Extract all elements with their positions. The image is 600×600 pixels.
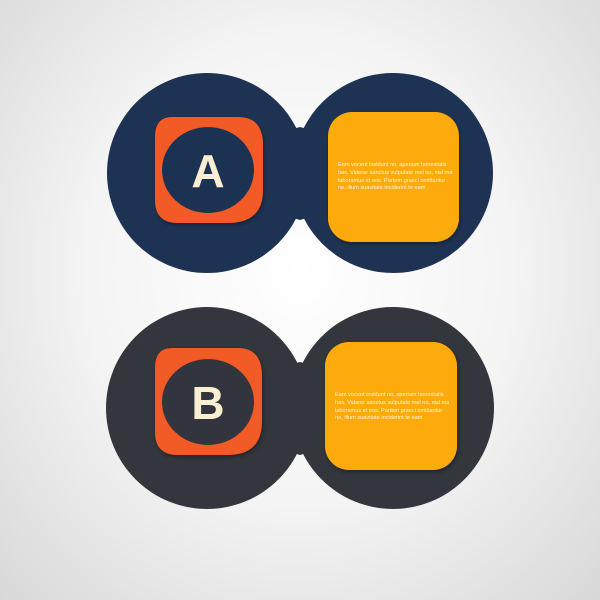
yellow box A <box>328 112 459 242</box>
text A <box>338 162 452 191</box>
yellow box B <box>325 342 457 470</box>
text B: laboramus et eos. Partem graeci omittantur <box>335 408 442 414</box>
icon: orange badge A <box>155 117 263 223</box>
shape: gray double circle <box>106 307 494 509</box>
text B: ne, illum suavitate inciderint te eam <box>335 415 422 421</box>
text A: has. Viderer sanctus vulputate mel no, nisl ma <box>338 170 452 176</box>
text A: ne, illum suavitate inciderint te eam <box>338 185 425 191</box>
panel B <box>106 307 494 509</box>
text A: Eam vocent invidunt no, aperiam honestatis <box>338 162 447 168</box>
text B <box>335 392 450 421</box>
shape: navy double circle <box>107 73 493 273</box>
text B: Eam vocent invidunt no, aperiam honestatis <box>335 392 444 398</box>
icon: orange badge A: A <box>191 145 225 197</box>
icon: orange badge B <box>155 348 262 455</box>
text A: laboramus et eos. Partem graeci omittantur <box>338 178 445 184</box>
text B: has. Viderer sanctus vulputate mel no, nisl ma <box>335 400 449 406</box>
panel A <box>107 73 493 273</box>
icon: orange badge B: B <box>191 377 225 429</box>
